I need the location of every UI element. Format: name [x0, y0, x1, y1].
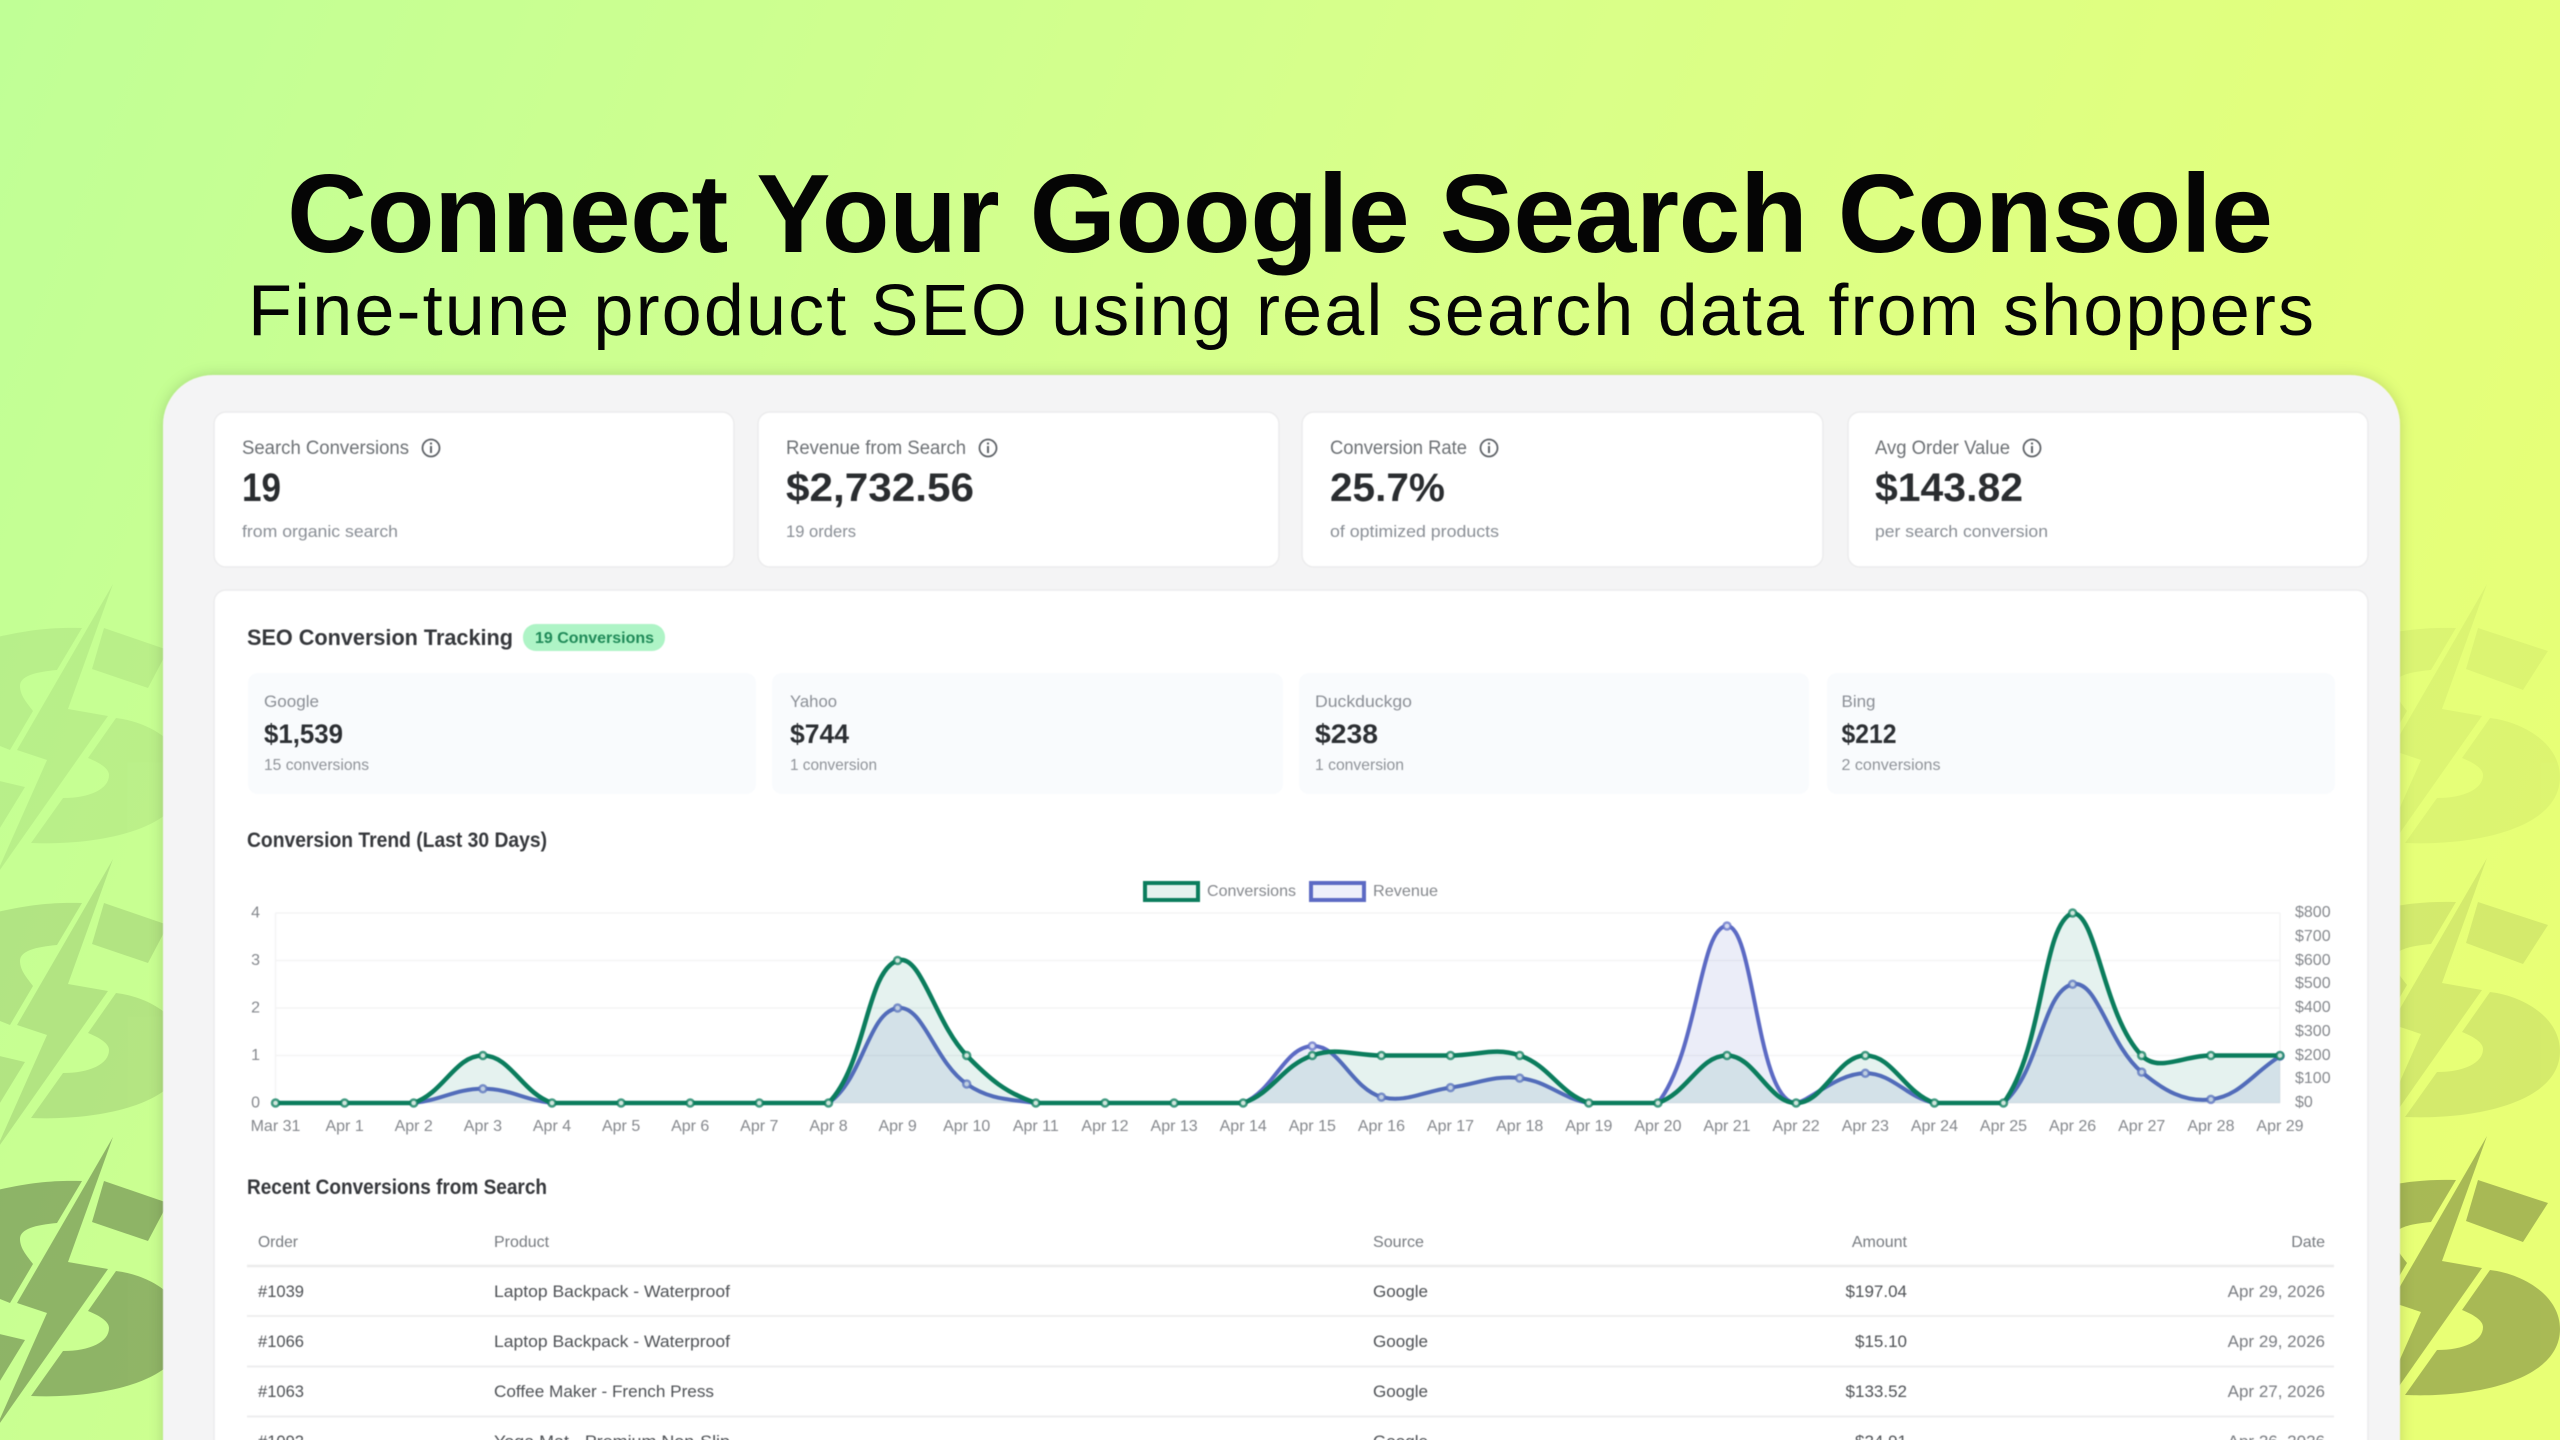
source card: bing: $212 [1842, 719, 1896, 749]
subtitle: Fine-tune product SEO using real search data from shoppers [248, 271, 2314, 351]
panel: seo conversion tracking card [214, 590, 2368, 1440]
source card: yahoo [772, 673, 1283, 794]
stat card: conversion rate: 25.7% [1330, 466, 1445, 510]
table row 1066 [258, 1332, 2325, 1351]
table row 1039: Laptop Backpack - Waterproof [494, 1282, 730, 1301]
source card: duckduckgo: Duckduckgo [1315, 692, 1412, 711]
stat card: search conversions: from organic search [242, 522, 398, 541]
table row 1063 [258, 1382, 2325, 1401]
table row 1039: Apr 29, 2026 [2228, 1282, 2325, 1301]
x axis date labels: Apr 9 [878, 1118, 917, 1135]
source card: google: Google [264, 692, 319, 711]
x axis date labels: Apr 25 [1980, 1118, 2027, 1135]
x axis date labels: Apr 17 [1427, 1118, 1474, 1135]
x axis date labels: Apr 22 [1773, 1118, 1820, 1135]
stat card: avg order value: per search conversion [1875, 522, 2048, 541]
right axis labels: $700 [2295, 928, 2331, 945]
table row 1039: #1039 [258, 1282, 304, 1301]
heading: seo conversion tracking: SEO Conversion Tracking [247, 625, 513, 650]
heading: conversion trend: Conversion Trend (Last 30 Days) [247, 829, 547, 852]
source card: duckduckgo: 1 conversion [1315, 757, 1404, 774]
x axis date labels: Apr 15 [1289, 1118, 1336, 1135]
x axis date labels: Apr 23 [1842, 1118, 1889, 1135]
stat card: conversion rate: Conversion Rate [1330, 438, 1467, 459]
right axis labels: $100 [2295, 1070, 2331, 1087]
table header: Product [494, 1234, 550, 1251]
left axis labels [251, 904, 260, 1112]
x axis date labels: Apr 11 [1013, 1118, 1059, 1135]
x axis date labels: Apr 29 [2256, 1118, 2304, 1135]
stat card: revenue from search [758, 412, 1279, 567]
left axis labels: 4 [251, 904, 260, 922]
source card: duckduckgo [1299, 673, 1809, 794]
table row 1066: Laptop Backpack - Waterproof [494, 1332, 730, 1351]
line series: conversions [272, 910, 2284, 1106]
x axis date labels: Apr 19 [1565, 1118, 1612, 1135]
source card: bing: 2 conversions [1842, 757, 1940, 774]
table row 1039: Google [1373, 1282, 1428, 1301]
source card: google [248, 673, 756, 794]
stat card: search conversions [214, 412, 734, 567]
source card: yahoo: $744 [790, 719, 849, 749]
legend: conversions and revenue [1145, 883, 1438, 900]
right axis labels: $300 [2295, 1023, 2331, 1040]
right axis labels: $0 [2295, 1094, 2313, 1111]
left axis labels: 2 [251, 1000, 260, 1016]
x axis date labels: Apr 5 [602, 1118, 640, 1135]
icon: lightning dollar top right [2344, 584, 2560, 877]
icon: lightning dollar middle left [0, 859, 186, 1152]
x axis date labels: Mar 31 [251, 1118, 300, 1135]
source card: yahoo: 1 conversion [790, 757, 877, 774]
table row 1066: Apr 29, 2026 [2228, 1332, 2325, 1351]
table: recent conversions [247, 1234, 2334, 1440]
x axis date labels: Apr 1 [325, 1118, 364, 1135]
x axis date labels: Apr 2 [395, 1118, 433, 1135]
stat card: avg order value: Avg Order Value [1875, 438, 2010, 459]
line series: revenue [276, 922, 2284, 1103]
table header: Source [1373, 1234, 1424, 1251]
left axis labels: 3 [251, 952, 260, 969]
table header: Date [2291, 1234, 2325, 1251]
right axis labels: $200 [2295, 1047, 2331, 1064]
badge: 19 conversions [523, 624, 665, 651]
badge: 19 conversions: 19 Conversions [535, 630, 654, 647]
table row 1063: Apr 27, 2026 [2228, 1382, 2325, 1401]
x axis date labels: Apr 27 [2118, 1118, 2165, 1135]
stat card: revenue from search: 19 orders [786, 522, 856, 541]
stat card: conversion rate [1302, 412, 1823, 567]
stat card: avg order value: $143.82 [1875, 466, 2023, 510]
panel: dashboard window [163, 375, 2400, 1440]
source card: duckduckgo: $238 [1315, 719, 1378, 749]
table row 1066: Google [1373, 1332, 1428, 1351]
left axis labels: 0 [251, 1094, 260, 1112]
table header [258, 1234, 2325, 1251]
x axis date labels: Apr 28 [2187, 1118, 2235, 1135]
stat card: conversion rate: of optimized products [1330, 522, 1499, 541]
table row 1063: $133.52 [1846, 1382, 1907, 1401]
source card: google: 15 conversions [264, 757, 369, 774]
stat card: search conversions: 19 [242, 466, 281, 510]
stat card: revenue from search: Revenue from Search [786, 438, 966, 459]
table row 1066: $15.10 [1855, 1332, 1907, 1351]
x axis date labels: Apr 12 [1081, 1118, 1129, 1135]
table row 1092 (cropped) [258, 1432, 2325, 1440]
x axis date labels: Apr 13 [1151, 1118, 1198, 1135]
right axis labels: $600 [2295, 952, 2331, 969]
icon: lightning dollar bottom left [0, 1137, 186, 1430]
stat card: avg order value [1848, 412, 2368, 567]
x axis date labels: Apr 10 [943, 1118, 990, 1135]
source card: google: $1,539 [264, 719, 343, 749]
icon: lightning dollar bottom right [2344, 1136, 2560, 1429]
right axis labels [2295, 904, 2331, 1111]
x axis date labels: Apr 18 [1496, 1118, 1543, 1135]
x axis date labels: Apr 26 [2049, 1118, 2096, 1135]
title: Connect Your Google Search Console [287, 152, 2273, 276]
table row 1039: $197.04 [1846, 1282, 1907, 1301]
heading: recent conversions: Recent Conversions from Search [247, 1176, 547, 1199]
source card: bing: Bing [1842, 692, 1876, 711]
table row 1063: #1063 [258, 1382, 304, 1401]
x axis date labels: Apr 20 [1634, 1118, 1682, 1135]
icon: lightning dollar top left [0, 584, 186, 877]
table header: Amount [1852, 1234, 1908, 1251]
table header: Order [258, 1234, 299, 1251]
source card: bing [1827, 673, 2335, 794]
icon: lightning dollar middle right [2344, 858, 2560, 1151]
x axis date labels: Apr 6 [671, 1118, 709, 1135]
legend: conversions and revenue: Revenue [1373, 883, 1438, 900]
left axis labels: 1 [251, 1047, 260, 1064]
table row 1039 [258, 1282, 2325, 1301]
x axis date labels: Apr 3 [464, 1118, 502, 1135]
x axis date labels [251, 1118, 2304, 1135]
legend: conversions and revenue: Conversions [1207, 883, 1296, 900]
x axis date labels: Apr 14 [1220, 1118, 1267, 1135]
stat card: revenue from search: $2,732.56 [786, 466, 974, 510]
x axis date labels: Apr 4 [533, 1118, 571, 1135]
stat card: search conversions: Search Conversions [242, 438, 409, 459]
x axis date labels: Apr 7 [740, 1118, 779, 1135]
source card: yahoo: Yahoo [790, 692, 837, 711]
table row 1066: #1066 [258, 1332, 304, 1351]
x axis date labels: Apr 24 [1911, 1118, 1958, 1135]
table row 1063: Google [1373, 1382, 1428, 1401]
chart: conversion trend line chart [251, 883, 2331, 1135]
x axis date labels: Apr 21 [1703, 1118, 1751, 1135]
right axis labels: $800 [2295, 904, 2331, 921]
right axis labels: $500 [2295, 975, 2331, 992]
x axis date labels: Apr 8 [809, 1118, 848, 1135]
table row 1063: Coffee Maker - French Press [494, 1382, 714, 1401]
right axis labels: $400 [2295, 999, 2331, 1016]
x axis date labels: Apr 16 [1358, 1118, 1405, 1135]
